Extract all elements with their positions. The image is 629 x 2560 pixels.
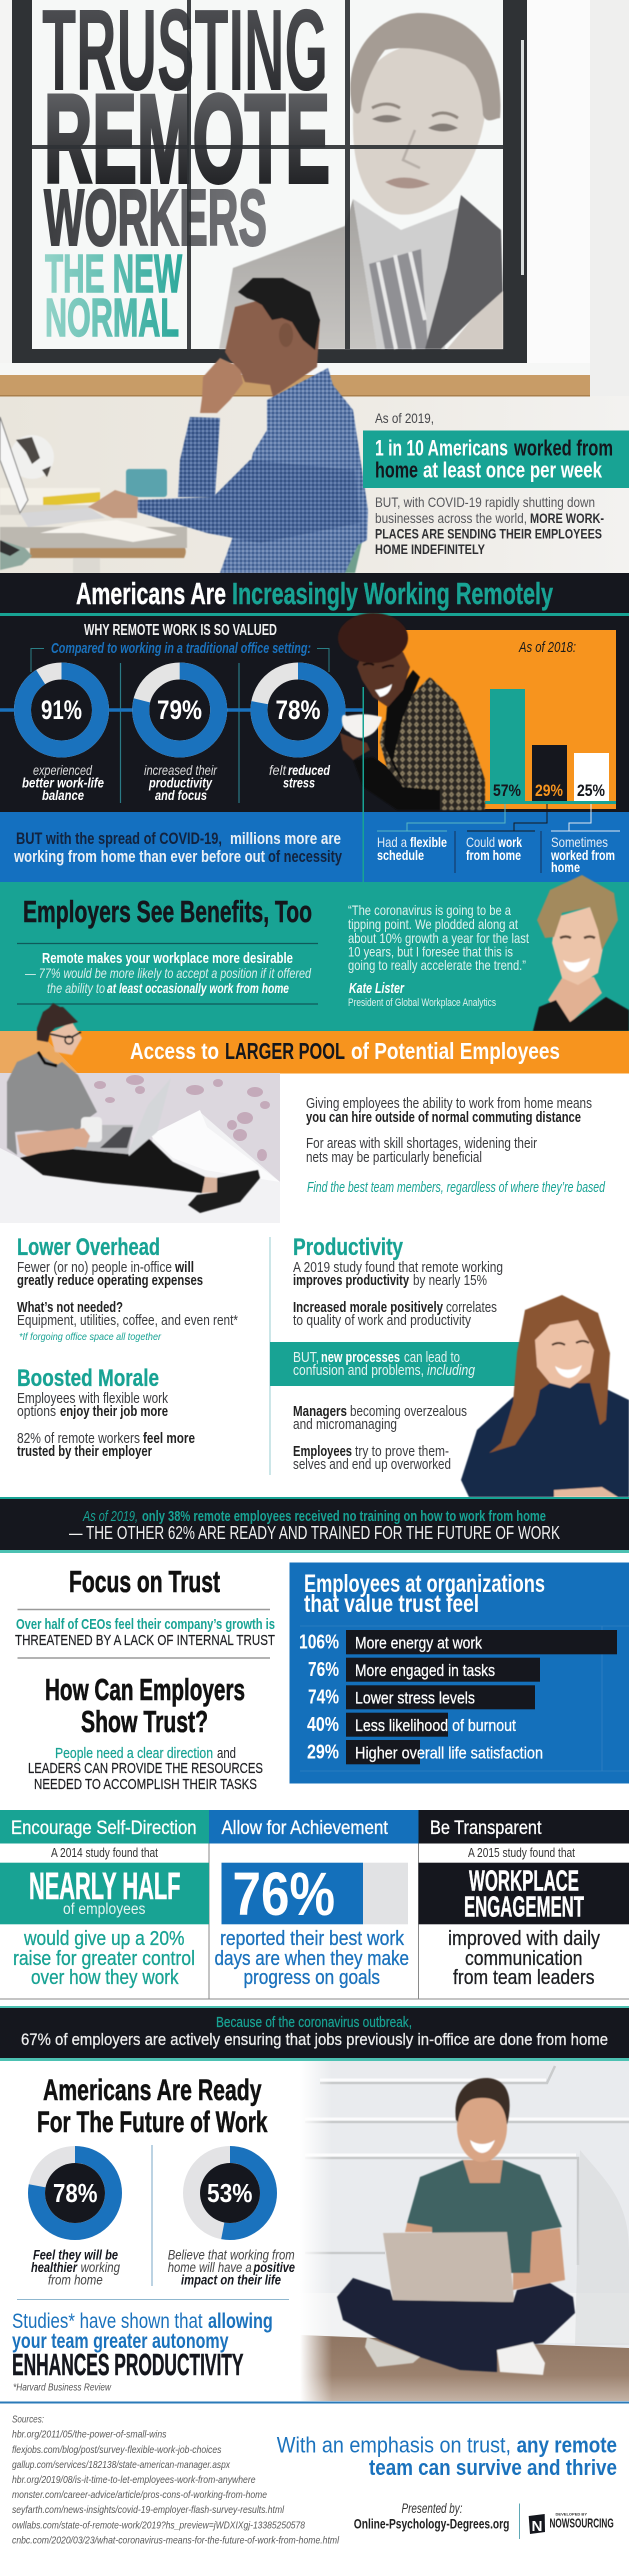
donut captions: reduced — [288, 762, 330, 778]
panel: focus on trust — [15, 1564, 275, 1793]
bar values: 74% — [308, 1686, 339, 1708]
desirability text: Remote makes your workplace more desirable — [42, 950, 293, 967]
panel: productivity: correlates — [446, 1300, 497, 1316]
chart category labels: flexible — [410, 834, 447, 850]
covid statement: millions more are — [230, 829, 341, 848]
chart connectors — [377, 804, 620, 873]
panel: trust bar chart — [290, 1562, 629, 1784]
teal callout: including — [427, 1363, 475, 1379]
donut captions: impact on their life — [181, 2273, 281, 2288]
covid statement: working from home than ever before out — [13, 847, 265, 866]
autonomy statement: allowing — [208, 2310, 273, 2333]
panel: lower overhead and boosted morale: What’s not needed? — [17, 1300, 123, 1316]
title: WORKERS — [44, 173, 267, 262]
column: self-direction: raise for greater control — [13, 1948, 195, 1970]
title: REMOTE — [44, 70, 330, 209]
panel: focus on trust: How Can Employers — [45, 1672, 245, 1707]
band title — [130, 1038, 560, 1064]
quote: President of Global Workplace Analytics — [348, 997, 496, 1009]
chart category labels: Had a — [377, 834, 407, 850]
sources: monster.com/career-advice/article/pros-cons-of-working-from-home — [12, 2489, 267, 2501]
donut: 78% — [259, 671, 337, 749]
donut captions: Believe that working from — [168, 2248, 295, 2263]
quote — [348, 902, 529, 1009]
band title: LARGER POOL — [225, 1038, 345, 1064]
sources: Sources: — [12, 2414, 44, 2426]
bar labels — [355, 1634, 543, 1762]
closing statement: With an emphasis on trust, — [277, 2432, 511, 2458]
bar labels: Less likelihood of burnout — [355, 1717, 516, 1735]
covid statement — [13, 829, 342, 866]
bar chart: as of 2018: 29% — [535, 782, 563, 800]
panel: ready for future of work: Americans Are Ready — [43, 2074, 262, 2107]
man at laptop — [88, 278, 368, 573]
chart category labels: from home — [466, 847, 521, 863]
column: transparency: Be Transparent — [430, 1818, 542, 1839]
panel: larger pool of employees — [0, 1003, 629, 1223]
closing statement — [277, 2432, 617, 2480]
panel: blue covid band — [0, 687, 629, 882]
donut captions: from home — [48, 2273, 103, 2288]
donut captions: Feel they will be — [33, 2248, 118, 2263]
donut captions: and focus — [155, 787, 207, 803]
panel: ready for future of work — [12, 2074, 295, 2394]
sources: seyfarth.com/news-insights/covid-19-employer-flash-survey-results.html — [12, 2504, 285, 2516]
desirability text: — 77% would be more likely to accept a position if it offered — [24, 965, 312, 981]
panel: focus on trust: Over half of CEOs feel their company’s growth is — [16, 1616, 275, 1633]
donut captions: felt — [269, 762, 287, 778]
donut: 53% positive impact — [192, 2154, 268, 2232]
panel: lower overhead and boosted morale: options — [17, 1404, 56, 1420]
column: transparency: A 2015 study found that — [468, 1846, 575, 1860]
column: self-direction: of employees — [63, 1901, 146, 1918]
teal callout: confusion and problems, — [293, 1363, 424, 1379]
column: transparency — [418, 1810, 629, 1989]
panel: focus on trust: NEEDED TO ACCOMPLISH THEIR TASKS — [34, 1776, 257, 1793]
panel: productivity: to quality of work and productivity — [293, 1313, 472, 1329]
teal callout: new processes — [321, 1350, 400, 1366]
donut captions: better work-life — [22, 774, 104, 790]
title: NORMAL — [45, 288, 179, 348]
covid statement: BUT with the spread of COVID-19, — [16, 829, 222, 848]
hero panel — [0, 0, 629, 573]
column: achievement: Allow for Achievement — [222, 1818, 389, 1839]
title: THE NEW — [45, 244, 182, 304]
covid statement: of necessity — [268, 847, 342, 866]
panel: focus on trust: People need a clear direction — [55, 1745, 213, 1762]
chart category labels: schedule — [377, 847, 424, 863]
chart category labels — [377, 834, 615, 875]
panel: lower overhead and boosted morale: *If forgoing office space all together — [19, 1331, 161, 1343]
sources: flexjobs.com/blog/post/survey-flexible-work-job-choices — [12, 2444, 222, 2456]
heading: Americans Are — [76, 576, 226, 611]
column: achievement: 76% — [232, 1860, 335, 1928]
donut captions: experienced — [33, 762, 93, 778]
autonomy statement: ENHANCES PRODUCTIVITY — [12, 2347, 244, 2382]
column: self-direction: Encourage Self-Direction — [11, 1818, 196, 1839]
panel: productivity: Productivity — [293, 1234, 404, 1261]
photo: Kate Lister — [533, 875, 629, 1031]
panel: trust bar chart: that value trust feel — [304, 1590, 479, 1618]
panel: productivity: selves and end up overworked — [293, 1457, 451, 1473]
heading — [76, 576, 554, 611]
panel: lower overhead and boosted morale: trusted by their employer — [17, 1444, 152, 1460]
intro text: As of 2019, — [375, 410, 434, 426]
bar chart: as of 2018: As of 2018: — [518, 640, 576, 656]
autonomy statement — [12, 2310, 273, 2394]
column: self-direction: NEARLY HALF — [29, 1866, 180, 1908]
donut: 91%: 91% — [41, 695, 82, 725]
donut: 79% — [141, 671, 219, 749]
donut: 78%: 78% — [276, 695, 320, 725]
panel: lower overhead and boosted morale: enjoy their job more — [60, 1404, 168, 1420]
sources: gallup.com/services/182138/state-american-manager.aspx — [12, 2459, 231, 2471]
desirability text — [24, 950, 312, 996]
quote: going to really accelerate the trend.” — [348, 957, 526, 973]
panel: productivity: improves productivity — [293, 1273, 409, 1289]
column: self-direction: A 2014 study found that — [51, 1846, 158, 1860]
panel: increasingly working remotely — [0, 573, 629, 812]
panel: productivity: try to prove them- — [355, 1444, 449, 1460]
panel: lower overhead and boosted morale: Boosted Morale — [17, 1365, 159, 1392]
orange header band — [0, 1031, 629, 1074]
panel: lower overhead and boosted morale: Fewer (or no) people in-office — [17, 1260, 172, 1276]
pool text: For areas with skill shortages, widening their — [306, 1136, 537, 1152]
donut captions: stress — [283, 774, 315, 790]
column: transparency: communication — [465, 1948, 582, 1970]
panel: focus on trust: Focus on Trust — [69, 1564, 220, 1599]
intro text — [363, 410, 629, 557]
panel: lower overhead and boosted morale: Employees with flexible work — [17, 1391, 169, 1407]
panel: ready for future of work: For The Future of Work — [37, 2106, 268, 2139]
teal callout box — [363, 430, 629, 488]
bar chart: as of 2018: 57% — [493, 782, 521, 800]
panel: productivity — [270, 1234, 629, 1497]
panel: productivity: Managers — [293, 1404, 347, 1420]
bar labels: Higher overall life satisfaction — [355, 1744, 543, 1762]
bar chart: as of 2018: 25% — [577, 782, 605, 800]
photo: smiling woman with brown hair — [461, 1295, 629, 1497]
photo: man with coffee mug — [338, 613, 485, 810]
panel: lower overhead and boosted morale: greatly reduce operating expenses — [17, 1273, 203, 1289]
panel: focus on trust: THREATENED BY A LACK OF INTERNAL TRUST — [15, 1632, 275, 1649]
chart category labels: home — [551, 859, 580, 875]
bar labels: More energy at work — [355, 1634, 483, 1652]
sources: cnbc.com/2020/03/23/what-coronavirus-means-for-the-future-of-work-from-home.html — [12, 2535, 340, 2547]
heading: Employers See Benefits, Too — [23, 894, 312, 929]
chart category labels: Could — [466, 834, 495, 850]
subheading: WHY REMOTE WORK IS SO VALUED — [84, 622, 277, 639]
panel: lower overhead and boosted morale — [17, 1234, 238, 1460]
quote: about 10% growth a year for the last — [348, 930, 529, 946]
panel: productivity: A 2019 study found that remote working — [293, 1260, 503, 1276]
panel: focus on trust: and — [217, 1745, 236, 1762]
intro text: 1 in 10 Americans — [375, 436, 508, 460]
desirability text: the ability to — [47, 980, 105, 996]
window with frame and panes — [12, 0, 527, 363]
panel: lower overhead and boosted morale: Lower Overhead — [17, 1234, 160, 1261]
panel: focus on trust: LEADERS CAN PROVIDE THE RESOURCES — [28, 1760, 263, 1777]
panel: productivity: Employees — [293, 1444, 352, 1460]
panel: productivity: Increased morale positively — [293, 1300, 443, 1316]
presented by credit: Online-Psychology-Degrees.org — [354, 2516, 509, 2532]
autonomy statement: Studies* have shown that — [12, 2310, 203, 2333]
portrait of man in window — [219, 13, 503, 349]
donut: 53% positive impact: 53% — [207, 2178, 252, 2208]
panel: coronavirus band: Because of the coronavirus outbreak, — [216, 2014, 412, 2031]
panel: lower overhead and boosted morale: Equipment, utilities, coffee, and even rent* — [17, 1313, 238, 1329]
panel: lower overhead and boosted morale: 82% of remote workers — [17, 1431, 140, 1447]
column: transparency: improved with daily — [448, 1928, 600, 1950]
column: achievement — [209, 1810, 418, 1989]
panel: lower overhead and boosted morale: will — [174, 1260, 194, 1276]
quote: 10 years, but I foresee that this is — [348, 944, 513, 960]
bar values: 106% — [299, 1632, 339, 1654]
donut captions — [31, 2248, 295, 2288]
window sill — [0, 363, 590, 396]
bar values — [299, 1632, 339, 1764]
column: self-direction — [0, 1810, 209, 1989]
pool text — [306, 1096, 606, 1196]
panel: trust bar chart: Employees at organizations — [304, 1570, 545, 1598]
intro text: MORE WORK- — [530, 510, 604, 526]
band title: of Potential Employees — [351, 1038, 560, 1064]
column: self-direction: over how they work — [31, 1967, 179, 1989]
donut captions: home will have a — [168, 2260, 252, 2275]
presented by credit — [354, 2501, 509, 2532]
band title: Access to — [130, 1038, 219, 1064]
bar labels: More engaged in tasks — [355, 1662, 495, 1680]
title — [42, 0, 330, 348]
intro text: businesses across the world, — [375, 510, 527, 526]
teal callout — [270, 1342, 530, 1386]
intro text: home — [375, 458, 418, 482]
sources: hbr.org/2011/05/the-power-of-small-wins — [12, 2428, 167, 2440]
panel: employers see benefits — [0, 875, 629, 1031]
bar values: 40% — [307, 1714, 339, 1736]
donut: 79%: 79% — [157, 695, 202, 725]
bar values: 76% — [308, 1659, 339, 1681]
subheading — [51, 622, 311, 657]
panel: coronavirus band — [0, 2006, 629, 2061]
sources: hbr.org/2019/08/is-it-time-to-let-employees-work-from-anywhere — [12, 2474, 256, 2486]
panel: training band — [0, 1497, 629, 1553]
column: achievement: days are when they make — [214, 1948, 409, 1970]
subheading: Compared to working in a traditional office setting: — [51, 640, 311, 657]
intro text: HOME INDEFINITELY — [375, 541, 486, 557]
logo: nowsourcing: N — [532, 2518, 542, 2535]
teal callout: BUT, — [293, 1350, 319, 1366]
panel: productivity: and micromanaging — [293, 1417, 397, 1433]
chart category labels: Sometimes — [551, 834, 608, 850]
donut captions: balance — [42, 787, 84, 803]
column: achievement: reported their best work — [220, 1928, 405, 1950]
donut captions: productivity — [148, 774, 213, 790]
photo: woman on bed with laptop — [0, 1003, 280, 1223]
logo: nowsourcing — [529, 2512, 614, 2535]
panel: focus on trust: Show Trust? — [81, 1704, 208, 1739]
panel: training band: As of 2019, — [82, 1509, 138, 1525]
bar values: 29% — [307, 1742, 339, 1764]
autonomy statement: your team greater autonomy — [12, 2330, 229, 2353]
panel: lower overhead and boosted morale: feel more — [143, 1431, 195, 1447]
pool text: nets may be particularly beneficial — [306, 1150, 482, 1166]
logo: nowsourcing: DEVELOPED BY — [556, 2512, 587, 2517]
panel: productivity: becoming overzealous — [350, 1404, 467, 1420]
column: transparency: from team leaders — [453, 1967, 594, 1989]
quote: tipping point. We plodded along at — [348, 916, 518, 932]
photo: man with laptop on floor — [300, 2061, 629, 2401]
donut: 78% healthier — [36, 2154, 114, 2232]
bar chart: as of 2018 — [378, 630, 616, 809]
quote: “The coronavirus is going to be a — [348, 902, 511, 918]
autonomy statement: *Harvard Business Review — [13, 2383, 112, 2394]
donut captions: healthier — [31, 2260, 78, 2275]
desk scene — [0, 417, 187, 573]
donut: 78% healthier: 78% — [53, 2178, 98, 2208]
column: achievement: progress on goals — [244, 1967, 380, 1989]
teal callout: can lead to — [404, 1350, 460, 1366]
donut captions — [22, 762, 330, 803]
donut captions: increased their — [144, 762, 218, 778]
panel: productivity: by nearly 15% — [413, 1273, 487, 1289]
quote: Kate Lister — [349, 980, 405, 997]
desirability text: at least occasionally work from home — [107, 980, 289, 996]
bar labels: Lower stress levels — [355, 1690, 475, 1708]
bars — [346, 1630, 617, 1764]
sources — [12, 2414, 340, 2547]
column: self-direction: would give up a 20% — [23, 1928, 185, 1950]
donut: 91% — [22, 671, 100, 749]
sources: owllabs.com/state-of-remote-work/2019?hs_preview=jWDXIXgj-13385250578 — [12, 2520, 305, 2532]
donut captions: working — [81, 2260, 120, 2275]
donut captions: positive — [253, 2260, 295, 2275]
chart category labels: work — [497, 834, 522, 850]
panel: three ways to show trust — [0, 1810, 629, 1999]
presented by credit: Presented by: — [402, 2501, 463, 2516]
